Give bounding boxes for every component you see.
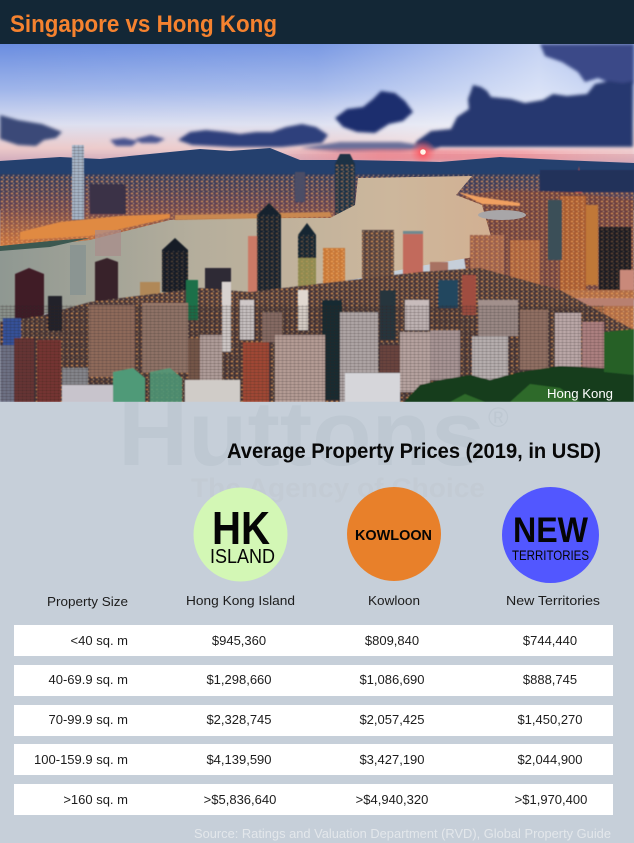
column headers: Property Size — [47, 594, 128, 609]
header bar — [0, 0, 634, 44]
trees — [404, 366, 634, 402]
lit shoreline — [20, 214, 170, 240]
column headers — [47, 593, 601, 609]
table row: over 160 sq. m — [14, 784, 613, 815]
table row: 100-159.9 sq. m: $3,427,190 — [359, 752, 425, 767]
table row: 40-69.9 sq. m: 40-69.9 sq. m — [48, 672, 128, 687]
table row: 70-99.9 sq. m: 70-99.9 sq. m — [48, 712, 128, 727]
harbour-front towers — [15, 268, 44, 324]
column headers: Kowloon — [368, 593, 420, 608]
icon: Kowloon: KOWLOON — [355, 527, 432, 544]
table row: 70-99.9 sq. m — [14, 705, 613, 736]
watermark: ® — [488, 402, 509, 433]
chart heading: Average Property Prices (2019, in USD) — [227, 440, 601, 463]
clouds — [0, 44, 634, 152]
watermark: Huttons — [118, 383, 485, 485]
table row: 100-159.9 sq. m: 100-159.9 sq. m — [34, 752, 128, 767]
harbour water — [0, 176, 492, 322]
icon: New Territories: NEW — [513, 511, 588, 550]
icon: New Territories: TERRITORIES — [512, 547, 589, 563]
residential blocks — [0, 345, 14, 402]
table row: under 40 sq. m — [14, 625, 613, 656]
title: Singapore vs Hong Kong — [10, 11, 277, 38]
photo: Hong Kong skyline at dusk — [0, 44, 634, 402]
table row: 100-159.9 sq. m — [14, 744, 613, 775]
table row: under 40 sq. m: $809,840 — [365, 633, 419, 648]
table row: 100-159.9 sq. m: $4,139,590 — [206, 752, 272, 767]
icon: HK Island: ISLAND — [210, 546, 275, 568]
table row: 40-69.9 sq. m: $1,086,690 — [359, 672, 425, 687]
watermark: The Agency of Choice — [191, 473, 485, 503]
table row: 40-69.9 sq. m: $1,298,660 — [206, 672, 272, 687]
mountains — [0, 148, 634, 210]
far city — [0, 145, 634, 300]
column headers: New Territories — [506, 593, 601, 608]
table row: over 160 sq. m: >$1,970,400 — [515, 792, 587, 807]
table row: 70-99.9 sq. m: $2,328,745 — [206, 712, 272, 727]
table row: over 160 sq. m: >160 sq. m — [63, 792, 128, 807]
icon: HK Island: HK — [212, 502, 270, 554]
table row: over 160 sq. m: >$5,836,640 — [204, 792, 276, 807]
icon: HK Island — [194, 488, 288, 582]
table row: 40-69.9 sq. m — [14, 665, 613, 696]
icon: Kowloon — [347, 487, 441, 581]
table row: 100-159.9 sq. m: $2,044,900 — [517, 752, 583, 767]
table row: 70-99.9 sq. m: $2,057,425 — [359, 712, 425, 727]
table row: under 40 sq. m: $744,440 — [523, 633, 577, 648]
table row: 40-69.9 sq. m: $888,745 — [523, 672, 577, 687]
photo caption: Hong Kong — [547, 386, 613, 401]
column headers: Hong Kong Island — [186, 593, 295, 608]
central towers — [0, 196, 634, 402]
table row: 70-99.9 sq. m: $1,450,270 — [517, 712, 583, 727]
source note: Source: Ratings and Valuation Department (RVD), Global Property Guide — [194, 827, 611, 841]
mid ground mass — [0, 268, 634, 402]
table row: under 40 sq. m: <40 sq. m — [71, 633, 128, 648]
table row: under 40 sq. m: $945,360 — [212, 633, 266, 648]
icon: New Territories — [502, 487, 599, 583]
table row: over 160 sq. m: >$4,940,320 — [356, 792, 428, 807]
